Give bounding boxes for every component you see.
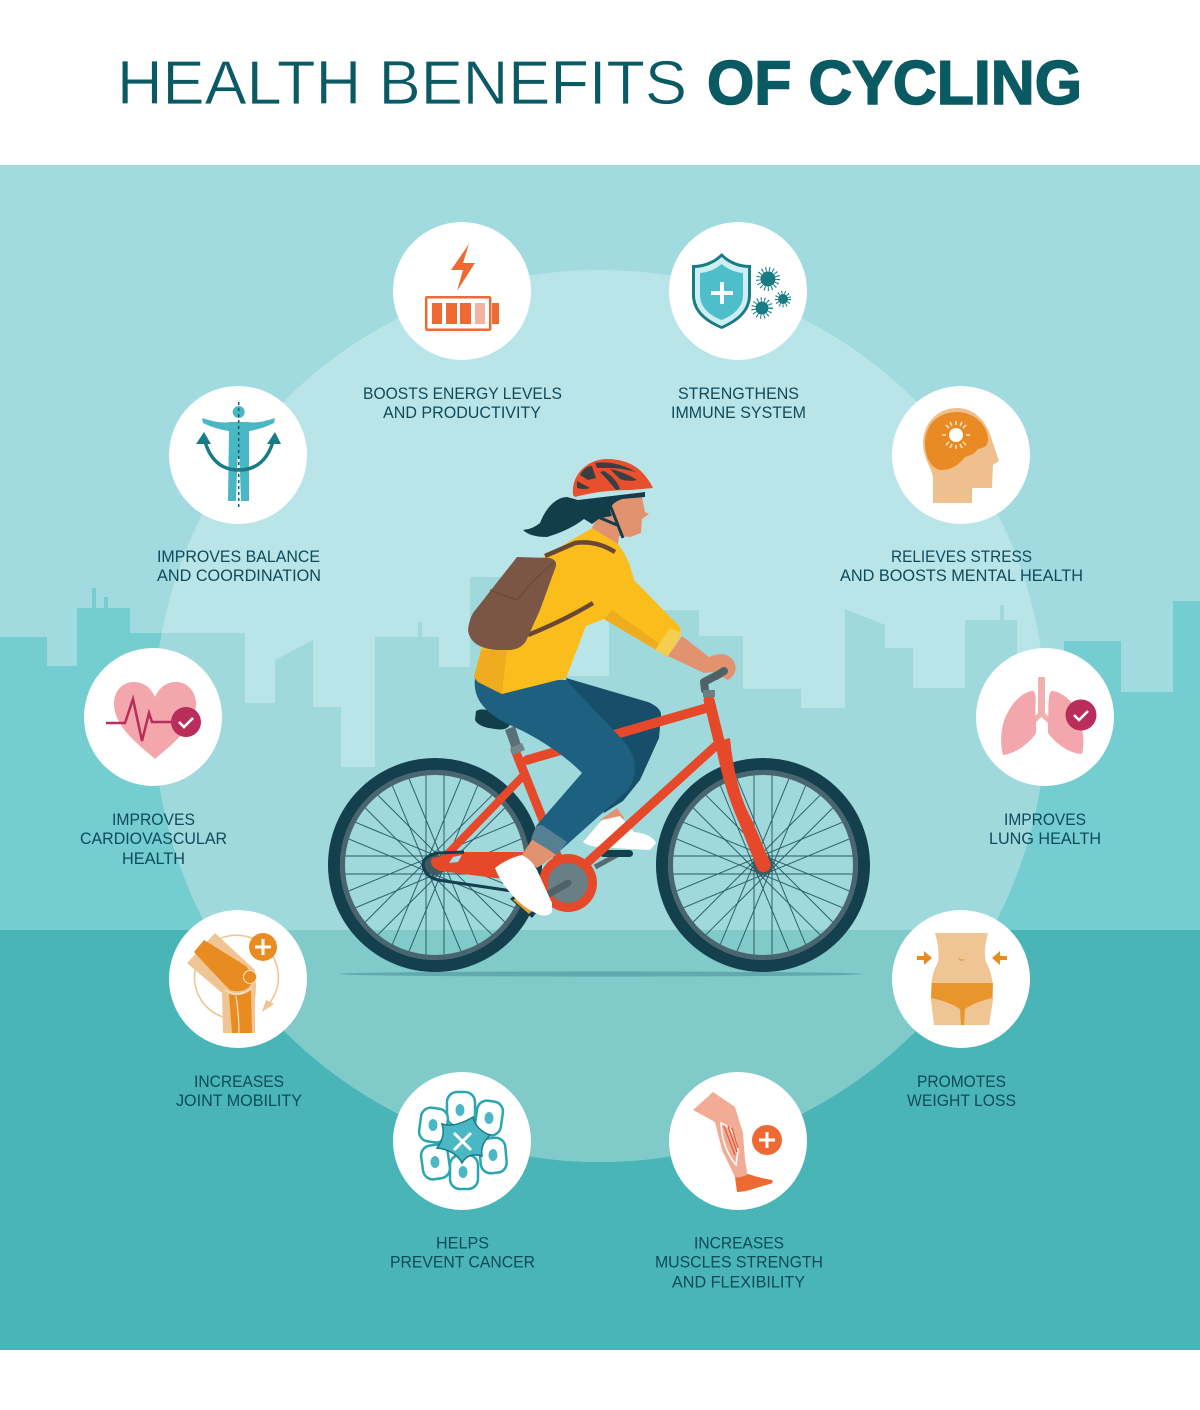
- panel: immune system: [669, 222, 807, 422]
- backpack: [468, 557, 556, 650]
- backpack straps: [528, 542, 615, 635]
- label: [157, 547, 321, 585]
- icon: figure with balance arc: [169, 386, 307, 524]
- panel: weight loss: [892, 910, 1030, 1110]
- label: [989, 810, 1101, 848]
- near pedal: [510, 893, 538, 918]
- hair and ponytail: [523, 492, 645, 537]
- icon: lungs with check: [976, 648, 1114, 786]
- icon: leg with muscle: [669, 1072, 807, 1210]
- near shoe: [495, 855, 552, 916]
- panel: boosts energy: [363, 222, 562, 422]
- near leg: [475, 678, 635, 850]
- label: INCREASES: [694, 1234, 784, 1252]
- icon: head with brain and sun: [892, 386, 1030, 524]
- label: CARDIOVASCULAR: [80, 829, 227, 848]
- label: [390, 1234, 535, 1272]
- grip: [716, 671, 724, 676]
- label: [176, 1072, 302, 1110]
- label: [363, 384, 562, 422]
- label: [80, 810, 227, 868]
- yellow shirt: [474, 528, 681, 694]
- bicycle frame: [437, 700, 720, 883]
- far ankle: [600, 808, 624, 826]
- panel: joint mobility: [169, 910, 307, 1110]
- ground shadow: [339, 971, 863, 977]
- panel: cardiovascular: [80, 648, 227, 868]
- label: IMMUNE SYSTEM: [671, 403, 806, 422]
- ankle: [522, 838, 556, 868]
- illustration: woman riding a bicycle: [334, 459, 864, 966]
- front wheel: [662, 764, 864, 966]
- label: IMPROVES: [112, 810, 195, 829]
- label: RELIEVES STRESS: [891, 547, 1032, 566]
- chain: [423, 852, 512, 891]
- far leg: [566, 678, 661, 813]
- label: AND COORDINATION: [157, 566, 321, 585]
- title: [117, 49, 1082, 118]
- label: LUNG HEALTH: [989, 829, 1101, 848]
- label: MUSCLES STRENGTH: [655, 1252, 823, 1272]
- chainring and crank: [539, 854, 597, 912]
- label: AND PRODUCTIVITY: [383, 403, 541, 422]
- saddle: [475, 709, 510, 729]
- label: BOOSTS ENERGY LEVELS: [363, 384, 562, 403]
- label: PROMOTES: [917, 1072, 1006, 1091]
- label: INCREASES: [194, 1072, 284, 1091]
- label: HEALTH: [122, 849, 185, 868]
- title: HEALTH BENEFITS: [117, 49, 687, 118]
- icon: shield and viruses: [669, 222, 807, 360]
- neck and face: [592, 497, 649, 544]
- fork: [715, 738, 771, 872]
- label: JOINT MOBILITY: [176, 1091, 302, 1110]
- icon: cells: [393, 1072, 531, 1210]
- chain guard cutout: [449, 855, 462, 863]
- label: PREVENT CANCER: [390, 1252, 535, 1272]
- label: STRENGTHENS: [678, 384, 799, 403]
- label: [907, 1072, 1016, 1110]
- label: IMPROVES BALANCE: [157, 547, 320, 566]
- label: AND BOOSTS MENTAL HEALTH: [840, 566, 1083, 585]
- icon: battery and lightning bolt: [393, 222, 531, 360]
- label: WEIGHT LOSS: [907, 1091, 1016, 1110]
- chain guard: [431, 852, 540, 880]
- panel: balance: [157, 386, 321, 585]
- shirt shading: [474, 610, 668, 694]
- backpack flap: [490, 562, 554, 600]
- rear wheel: [334, 764, 536, 966]
- icon: knee joint: [169, 910, 307, 1048]
- label: [655, 1234, 823, 1292]
- panel: prevent cancer: [390, 1072, 535, 1272]
- arm and hand: [668, 636, 736, 680]
- helmet strap: [598, 505, 623, 538]
- icon: heart with pulse: [84, 648, 222, 786]
- title: OF CYCLING: [707, 49, 1082, 118]
- jeans cuff: [531, 825, 567, 855]
- label: IMPROVES: [1004, 810, 1086, 829]
- far shoe: [583, 816, 656, 850]
- panel: stress: [840, 386, 1083, 585]
- panel: lungs: [976, 648, 1114, 848]
- far pedal and crank: [595, 850, 633, 867]
- icon: waist with arrows: [892, 910, 1030, 1048]
- label: HELPS: [436, 1234, 489, 1252]
- helmet: [573, 459, 653, 497]
- shirt cuff: [655, 628, 682, 657]
- seat collar: [510, 743, 525, 755]
- label: [840, 547, 1083, 585]
- label: AND FLEXIBILITY: [672, 1272, 805, 1292]
- panel: muscle strength: [655, 1072, 823, 1292]
- central light circle: [159, 270, 1040, 1162]
- label: [671, 384, 806, 422]
- seat post: [505, 726, 521, 752]
- handlebar and stem: [703, 671, 725, 697]
